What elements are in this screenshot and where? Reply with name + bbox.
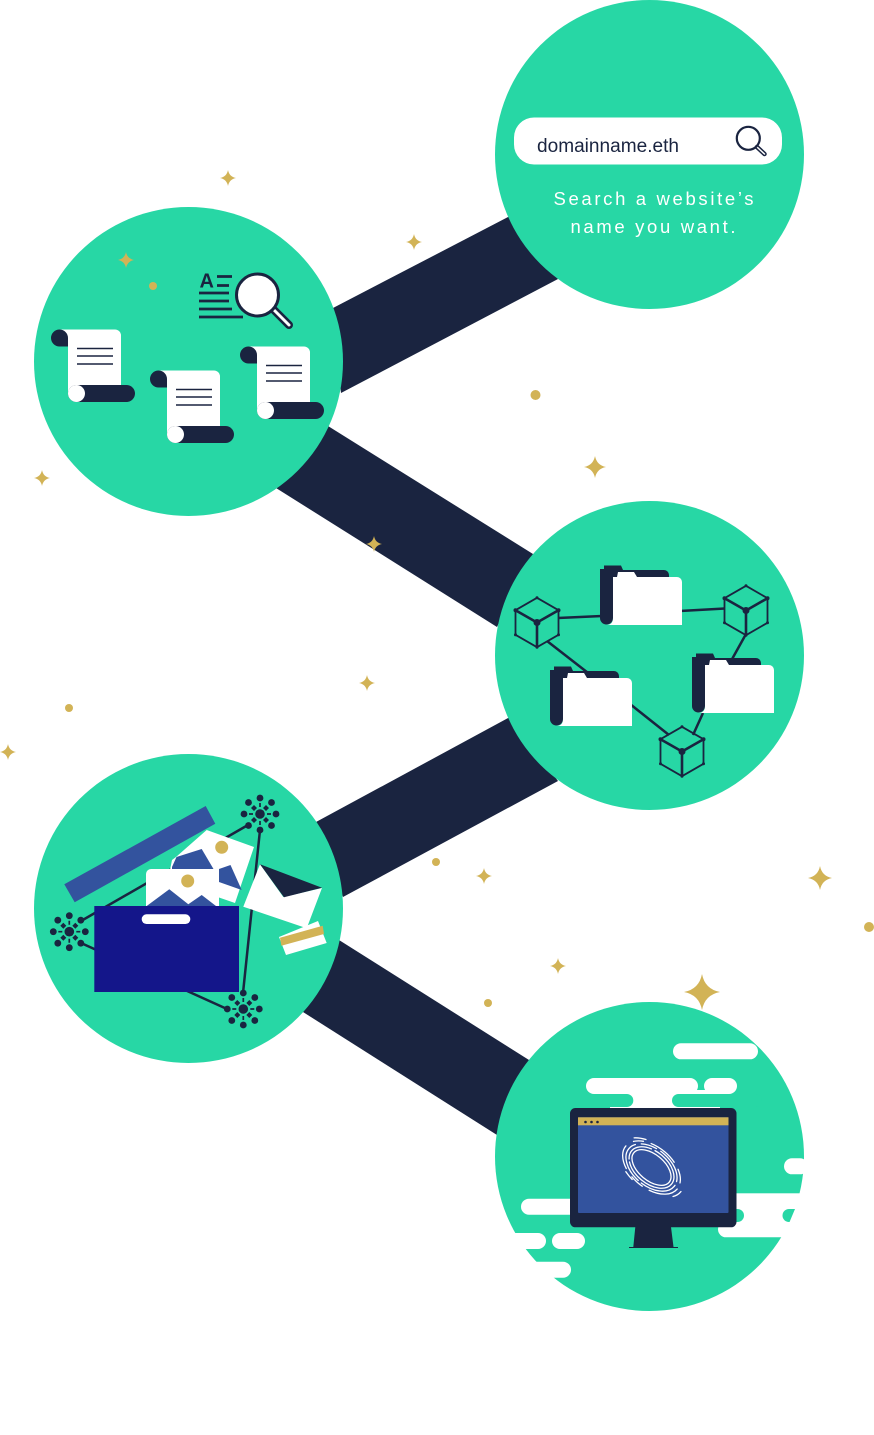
folder 2 — [550, 666, 632, 726]
icon: text with magnifier — [199, 270, 289, 325]
folder 3 — [692, 654, 774, 713]
node cube 1 — [514, 596, 560, 649]
scroll 2 — [150, 370, 234, 443]
connector bands — [276, 216, 558, 1135]
monitor — [570, 1108, 736, 1248]
hub 3 — [224, 990, 263, 1028]
hub 1 — [241, 795, 279, 833]
white outside circle corner — [782, 1209, 810, 1240]
caption: Search a website’s — [554, 188, 754, 209]
card — [279, 921, 327, 955]
search bar — [514, 118, 782, 164]
circle: search step — [495, 0, 804, 309]
node cube 2 — [722, 584, 770, 637]
scroll 1 — [51, 330, 135, 402]
caption — [554, 188, 754, 237]
hub 2 — [50, 912, 89, 951]
icon: magnifier — [737, 127, 764, 154]
envelope — [243, 864, 322, 928]
circle: monitor with fingerprint — [495, 1002, 810, 1311]
decorative gold sparkles and dots — [0, 170, 874, 1010]
circle: distributed network of folders — [495, 501, 804, 810]
folder 1 — [600, 566, 682, 625]
scroll 3 — [240, 346, 324, 419]
network links — [547, 608, 746, 735]
fingerprint — [608, 1126, 695, 1209]
node cube 3 — [658, 725, 706, 778]
caption: name you want. — [570, 216, 736, 237]
cloud gaps — [560, 1094, 800, 1222]
clouds — [500, 1043, 810, 1278]
domain name text: domainname.eth — [537, 136, 679, 157]
box — [94, 906, 239, 992]
icon: text with magnifier: A — [200, 270, 214, 292]
circle: box of files — [34, 754, 343, 1063]
box lid — [64, 806, 215, 902]
rear picture — [168, 830, 254, 903]
network links — [81, 825, 260, 1009]
circle: scrolls and text search — [34, 207, 343, 516]
front picture — [146, 869, 219, 906]
